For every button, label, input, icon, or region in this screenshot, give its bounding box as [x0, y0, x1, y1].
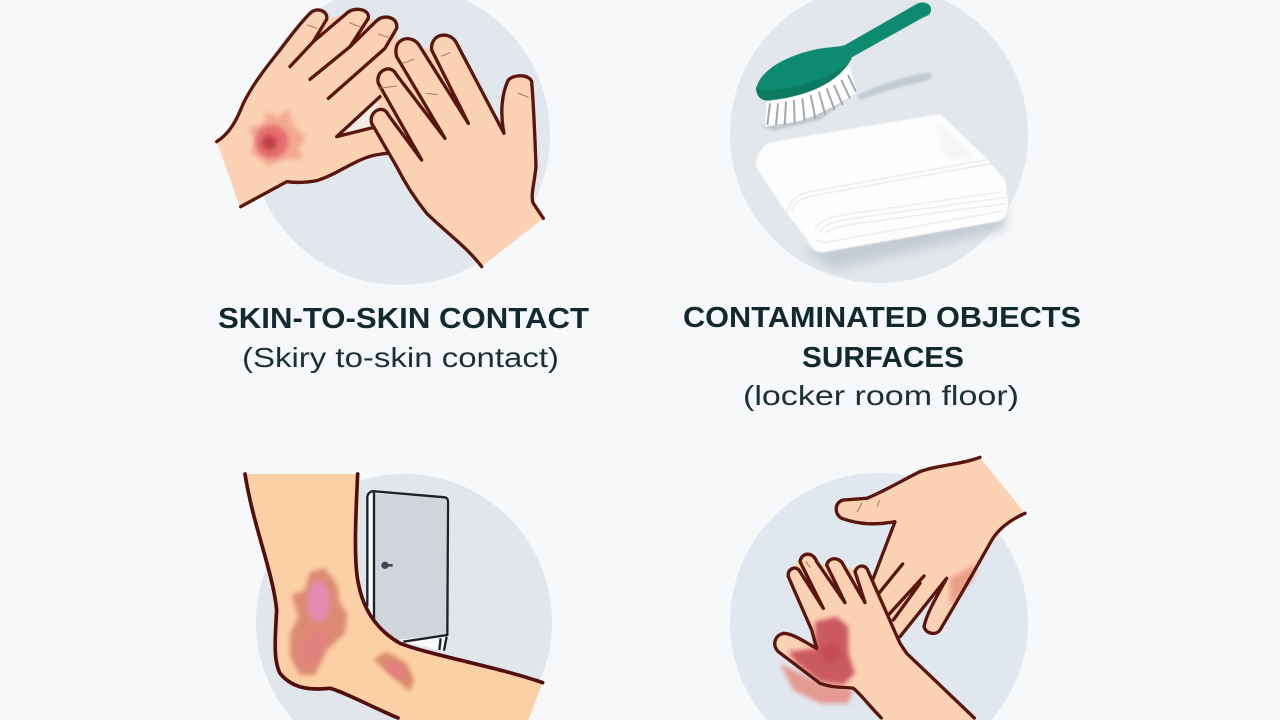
small rash: [373, 652, 414, 692]
folded towel: [756, 114, 1008, 252]
illustration: ankle with rash and locker: [245, 474, 543, 720]
panel: skin-to-skin contact: [217, 0, 550, 285]
heading: contaminated objects surfaces: SURFACES: [802, 342, 964, 374]
illustration: hand reaching for a rash-covered hand: [775, 457, 1025, 720]
panel: locker room foot: [245, 474, 552, 720]
rash on lower hand: [780, 617, 855, 703]
hand with rash: [217, 9, 400, 207]
leg: [245, 474, 543, 720]
background circle: panel 3: [256, 474, 552, 720]
panel: contaminated objects: [730, 0, 1028, 283]
upper hand: [836, 457, 1025, 637]
large rash: [290, 568, 347, 675]
heading: contaminated objects surfaces: [683, 302, 1081, 374]
hairbrush: [756, 2, 931, 131]
caption: locker room floor: (locker room floor): [743, 380, 1019, 411]
illustration: two touching hands: [217, 9, 543, 267]
locker: [367, 491, 448, 652]
lower hand: [775, 554, 977, 720]
rash on hand: [248, 108, 306, 167]
towel shadow: [803, 207, 1007, 270]
heading: skin-to-skin contact: SKIN-TO-SKIN CONTACT: [218, 303, 589, 335]
background circle: panel 2: [730, 0, 1028, 283]
panel: hand contact: [730, 457, 1028, 720]
background circle: panel 4: [730, 473, 1028, 720]
illustration: hairbrush and towel: [756, 2, 1008, 270]
caption: skin-to-skin contact: (Skiry to-skin contact): [242, 342, 559, 373]
rash on upper hand: [950, 563, 977, 607]
background circle: panel 1: [250, 0, 550, 285]
brush shadow: [857, 73, 932, 100]
front hand: [371, 35, 543, 267]
heading: contaminated objects surfaces: CONTAMINATED OBJECTS: [683, 302, 1081, 334]
